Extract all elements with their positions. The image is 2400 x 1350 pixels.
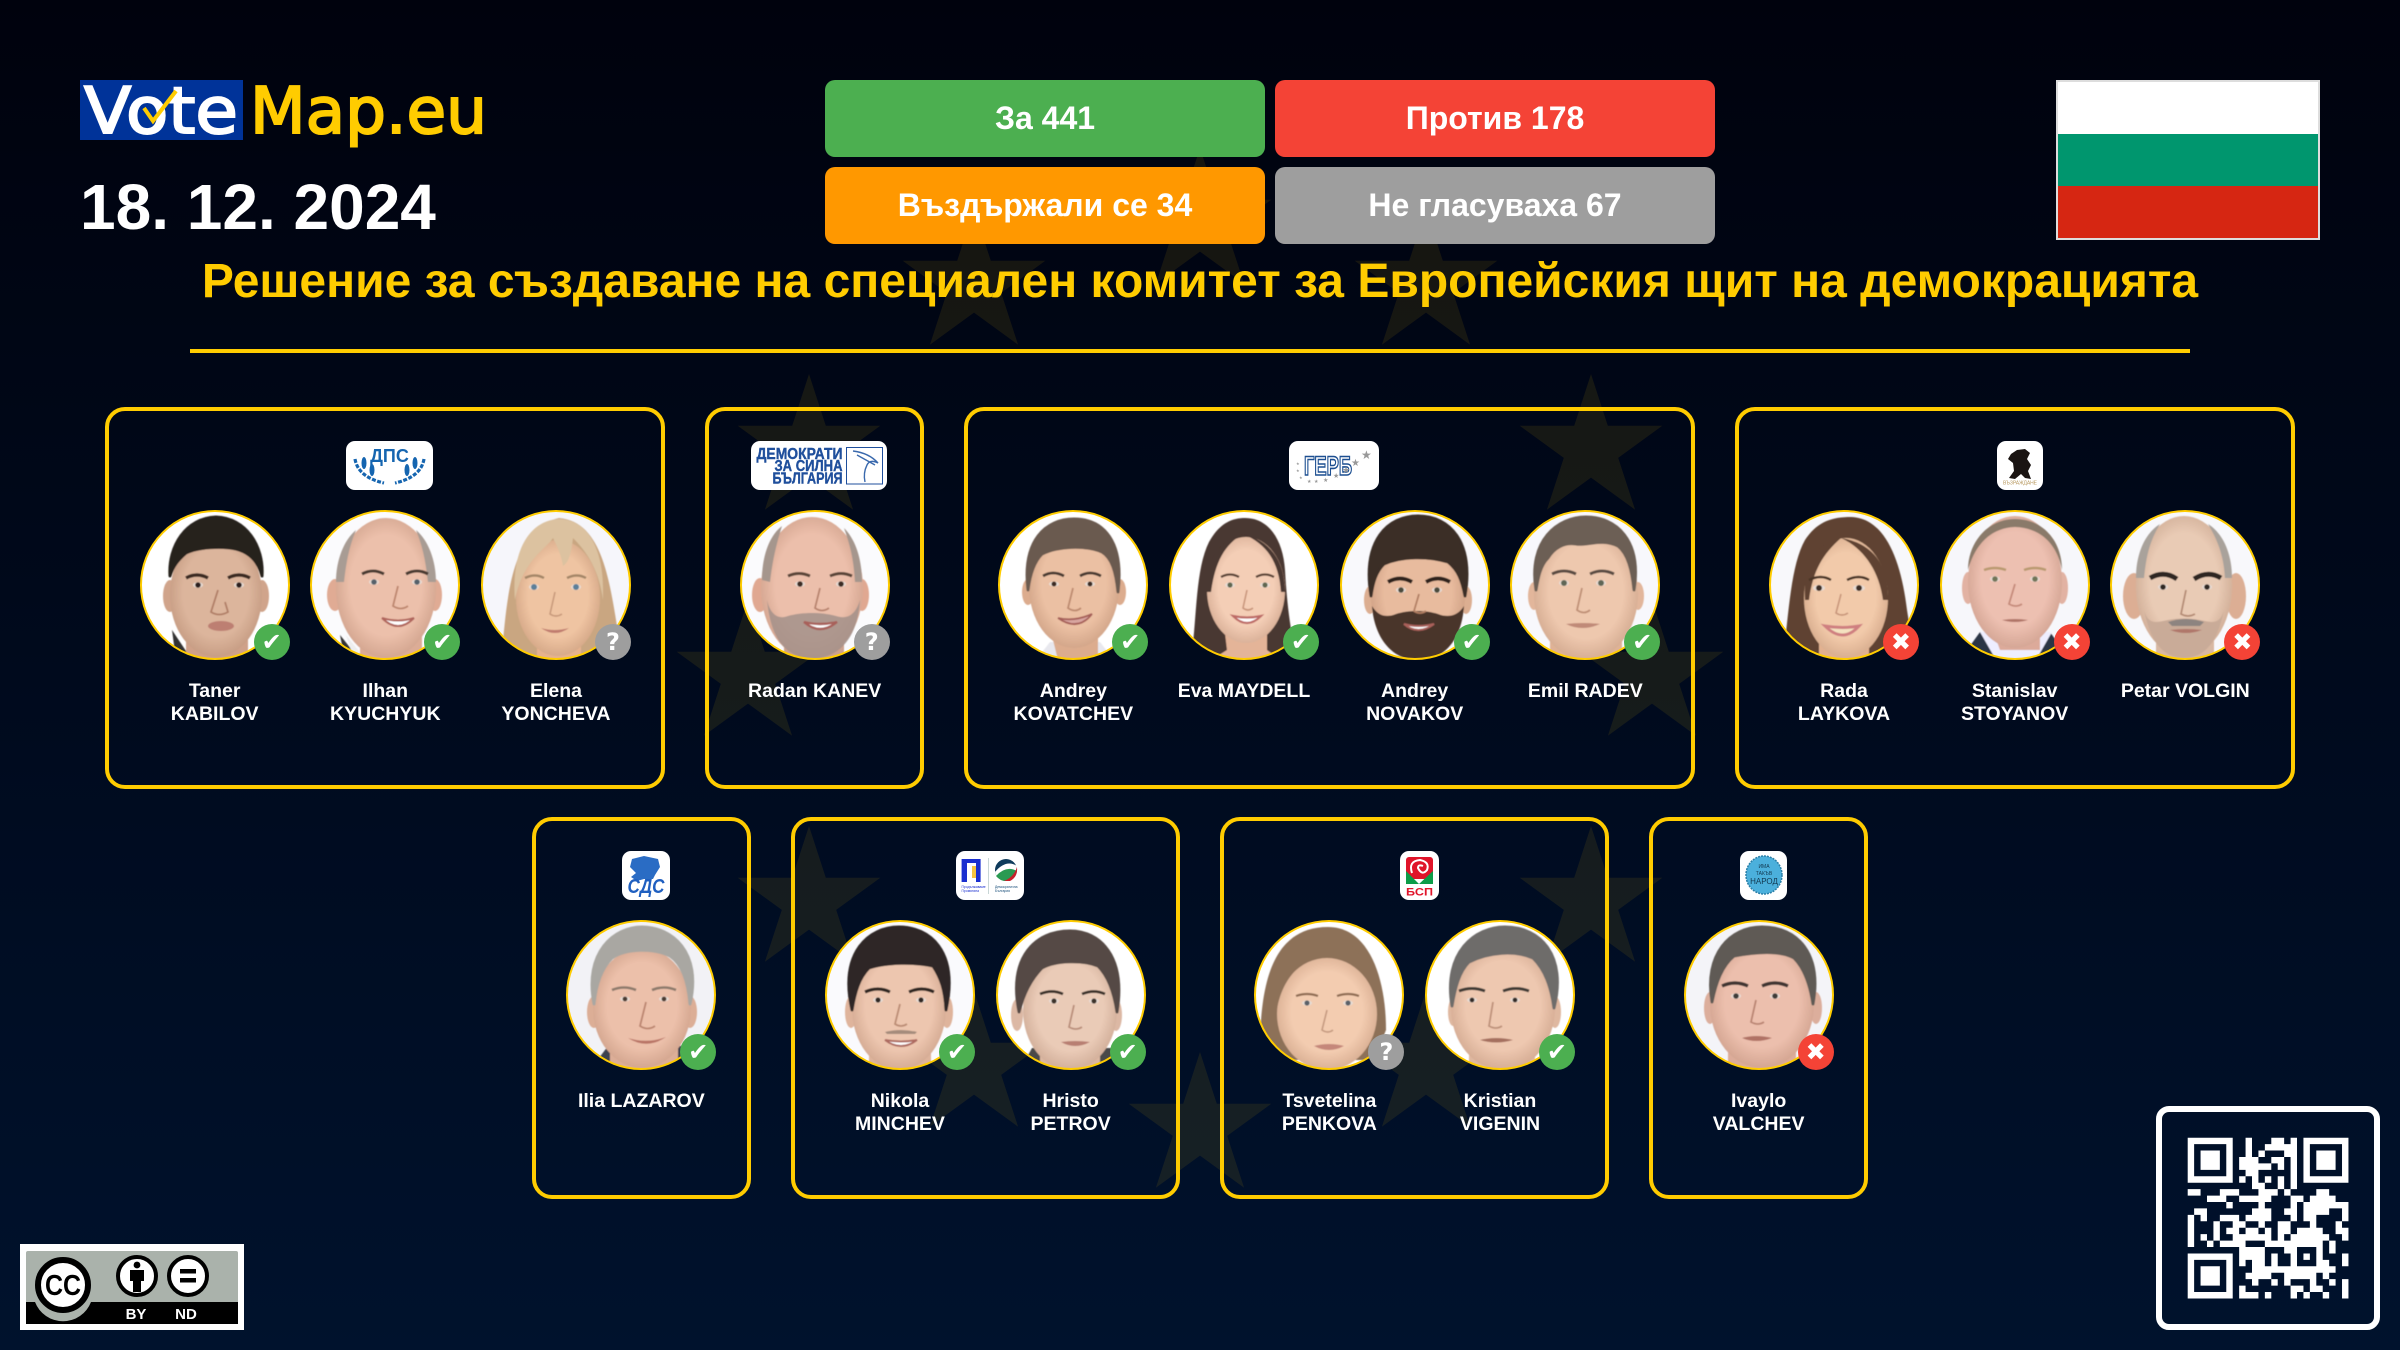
badge: for [680,1034,716,1070]
badge: did not vote: ? [1379,1038,1393,1066]
badge: for: ✔ [1632,628,1652,656]
panel: Има такъв народ [1649,817,1868,1199]
person: Kristian VIGENIN [1425,920,1575,1135]
name: VIGENIN [1460,1113,1540,1135]
name: STOYANOV [1961,703,2068,725]
QR code [2156,1106,2380,1330]
party logo: ГЕРБ: ★ [1296,461,1300,466]
badge: against: ✖ [2062,628,2082,656]
vote count: did not vote [1275,167,1715,244]
panel: СДС [532,817,751,1199]
name: Nikola [871,1090,929,1112]
badge: for [1454,624,1490,660]
party logo: ГЕРБ: ★ [1307,479,1312,485]
party logo: ИТН [1740,851,1787,900]
portrait [1510,510,1660,660]
panel: ПП-ДБ [791,817,1180,1199]
party logo: ИТН: НАРОД [1750,877,1778,886]
party logo: ПП-ДБ: Промяната [961,889,979,893]
name: Rada [1820,680,1868,702]
members row [1254,920,1575,1135]
name [1712,1090,1805,1135]
badge: did not vote [854,624,890,660]
portrait [566,920,716,1070]
badge: against [2224,624,2260,660]
vote count: abstained: Въздържали се 34 [898,187,1192,223]
portrait [740,510,890,660]
name: Kristian [1464,1090,1536,1112]
name: Petar VOLGIN [2121,680,2250,702]
title: Решение за създаване на специален комитет за Европейския щит на демокрацията [202,255,2198,308]
portrait [1769,510,1919,660]
badge: for [1283,624,1319,660]
name [1366,680,1464,725]
name [855,1090,945,1135]
party logo: ГЕРБ: ГЕРБ [1304,451,1352,481]
name: KYUCHYUK [330,703,441,725]
person: Eva MAYDELL [1169,510,1319,702]
portrait [140,510,290,660]
members row [1684,920,1834,1135]
badge: did not vote [1368,1034,1404,1070]
badge: against: ✖ [1891,628,1911,656]
portrait [310,510,460,660]
panel: ДПС [105,407,665,789]
name: PETROV [1031,1113,1111,1135]
person: Ilhan KYUCHYUK [310,510,460,725]
license badge: CC BY-ND: BY [126,1306,146,1323]
person: Nikola MINCHEV [825,920,975,1135]
party logo: ДПС [346,441,433,490]
license badge: CC BY-ND [20,1244,244,1330]
name: KABILOV [171,703,259,725]
party logo: БСП: БСП [1406,886,1433,898]
badge: for: ✔ [1462,628,1482,656]
party logo: ПП-ДБ: Продължаваме [961,885,986,889]
portrait [1340,510,1490,660]
logo: VoteMap.eu [80,80,487,149]
name [1460,1090,1540,1135]
badge: for [254,624,290,660]
portrait [825,920,975,1070]
name: Ilia LAZAROV [578,1090,705,1112]
person: Emil RADEV [1510,510,1660,702]
party logo: ИТН: ТАКЪВ [1756,871,1773,877]
person: Taner KABILOV [140,510,290,725]
name [501,680,610,725]
party logo: ДСБ: ЗА СИЛНА [774,458,842,475]
members row [825,920,1146,1135]
name [330,680,441,725]
members row [1769,510,2260,725]
person: Ivaylo VALCHEV [1684,920,1834,1135]
portrait [1940,510,2090,660]
party logo: ДСБ [751,441,887,490]
person: Andrey NOVAKOV [1340,510,1490,725]
badge: for: ✔ [1291,628,1311,656]
vote count: for [825,80,1265,157]
panel: Възраждане [1735,407,2295,789]
name: Ivaylo [1731,1090,1786,1112]
name: LAYKOVA [1798,703,1890,725]
license badge: CC BY-ND: ND [175,1306,197,1323]
name [171,680,259,725]
name: Elena [530,680,582,702]
person: Elena YONCHEVA [481,510,631,725]
party logo: ИТН: ИМА [1758,864,1770,870]
portrait [481,510,631,660]
party logo: ГЕРБ: ★ [1333,472,1339,480]
party logo: ГЕРБ: ★ [1314,479,1319,485]
name: KOVATCHEV [1014,703,1133,725]
badge: for [1110,1034,1146,1070]
person: Tsvetelina PENKOVA [1254,920,1404,1135]
name: Hristo [1042,1090,1099,1112]
panel: Демократи за силна България [705,407,924,789]
badge: for: ✔ [688,1038,708,1066]
party logo: ГЕРБ [1289,441,1379,490]
person: Andrey KOVATCHEV [998,510,1148,725]
badge: for: ✔ [1547,1038,1567,1066]
badge: for: ✔ [947,1038,967,1066]
name: Tsvetelina [1282,1090,1376,1112]
badge: against: ✖ [1806,1038,1826,1066]
vote count: did not vote: Не гласуваха 67 [1368,187,1622,223]
members row [740,510,890,702]
name: Taner [189,680,240,702]
portrait [1169,510,1319,660]
party logo: ДСБ: ДЕМОКРАТИ [756,446,842,463]
badge: for [1539,1034,1575,1070]
party logo: Възраждане [1997,441,2043,490]
panel: БСП [1220,817,1609,1199]
name: MINCHEV [855,1113,945,1135]
license badge: CC BY-ND: CC [45,1270,81,1302]
name: Andrey [1040,680,1107,702]
party logo: Възраждане: ВЪЗРАЖДАНЕ [2003,480,2038,486]
party logo: ДСБ: БЪЛГАРИЯ [772,470,842,488]
name: Andrey [1381,680,1448,702]
person: Ilia LAZAROV [566,920,716,1112]
date: 18. 12. 2024 [80,171,436,243]
badge: for: ✔ [1118,1038,1138,1066]
name [1798,680,1890,725]
name [1282,1090,1377,1135]
person: Stanislav STOYANOV [1940,510,2090,725]
badge: did not vote: ? [865,628,879,656]
badge: for: ✔ [432,628,452,656]
name: Emil RADEV [1528,680,1643,702]
name: NOVAKOV [1366,703,1463,725]
party logo: ПП-ДБ [956,851,1024,900]
badge: for [424,624,460,660]
badge: for [1624,624,1660,660]
person: Radan KANEV [740,510,890,702]
name [1014,680,1133,725]
badge: for: ✔ [1120,628,1140,656]
party logo: ГЕРБ: ★ [1323,477,1328,484]
portrait [998,510,1148,660]
portrait [996,920,1146,1070]
name: Stanislav [1972,680,2057,702]
party logo: ДПС: ДПС [370,446,409,466]
members row [140,510,631,725]
portrait [1684,920,1834,1070]
person: Hristo PETROV [996,920,1146,1135]
name: Eva MAYDELL [1178,680,1310,702]
party logo: СДС: СДС [628,876,665,898]
party logo: ГЕРБ: ★ [1299,475,1303,480]
flag: Bulgaria [2056,80,2320,240]
badge: against: ✖ [2232,628,2252,656]
badge: against [1798,1034,1834,1070]
name: YONCHEVA [501,703,610,725]
badge: for [1112,624,1148,660]
badge: against [1883,624,1919,660]
badge: for: ✔ [262,628,282,656]
name [1961,680,2068,725]
portrait [1254,920,1404,1070]
vote count: against: Против 178 [1406,100,1584,136]
party logo: ГЕРБ: ★ [1351,458,1360,469]
party logo: ГЕРБ: ★ [1361,448,1372,462]
person: Rada LAYKOVA [1769,510,1919,725]
badge: did not vote: ? [606,628,620,656]
members row [566,920,716,1112]
badge: did not vote [595,624,631,660]
badge: for [939,1034,975,1070]
name: Ilhan [363,680,408,702]
name: PENKOVA [1282,1113,1377,1135]
members row [998,510,1660,725]
vote count: for: За 441 [995,100,1095,136]
name: VALCHEV [1713,1113,1805,1135]
party logo: ПП-ДБ: България [995,889,1010,893]
portrait [1425,920,1575,1070]
panel: ГЕРБ [964,407,1695,789]
name [1031,1090,1111,1135]
party logo: ПП-ДБ: Демократична [995,885,1018,889]
vote count: abstained [825,167,1265,244]
person: Petar VOLGIN [2110,510,2260,702]
portrait [2110,510,2260,660]
name: Radan KANEV [748,680,881,702]
party logo: СДС [622,851,670,900]
vote count: against [1275,80,1715,157]
party logo: БСП [1400,851,1438,900]
party logo: ГЕРБ: ★ [1342,466,1350,476]
badge: against [2054,624,2090,660]
party logo: ГЕРБ: ★ [1296,468,1300,473]
